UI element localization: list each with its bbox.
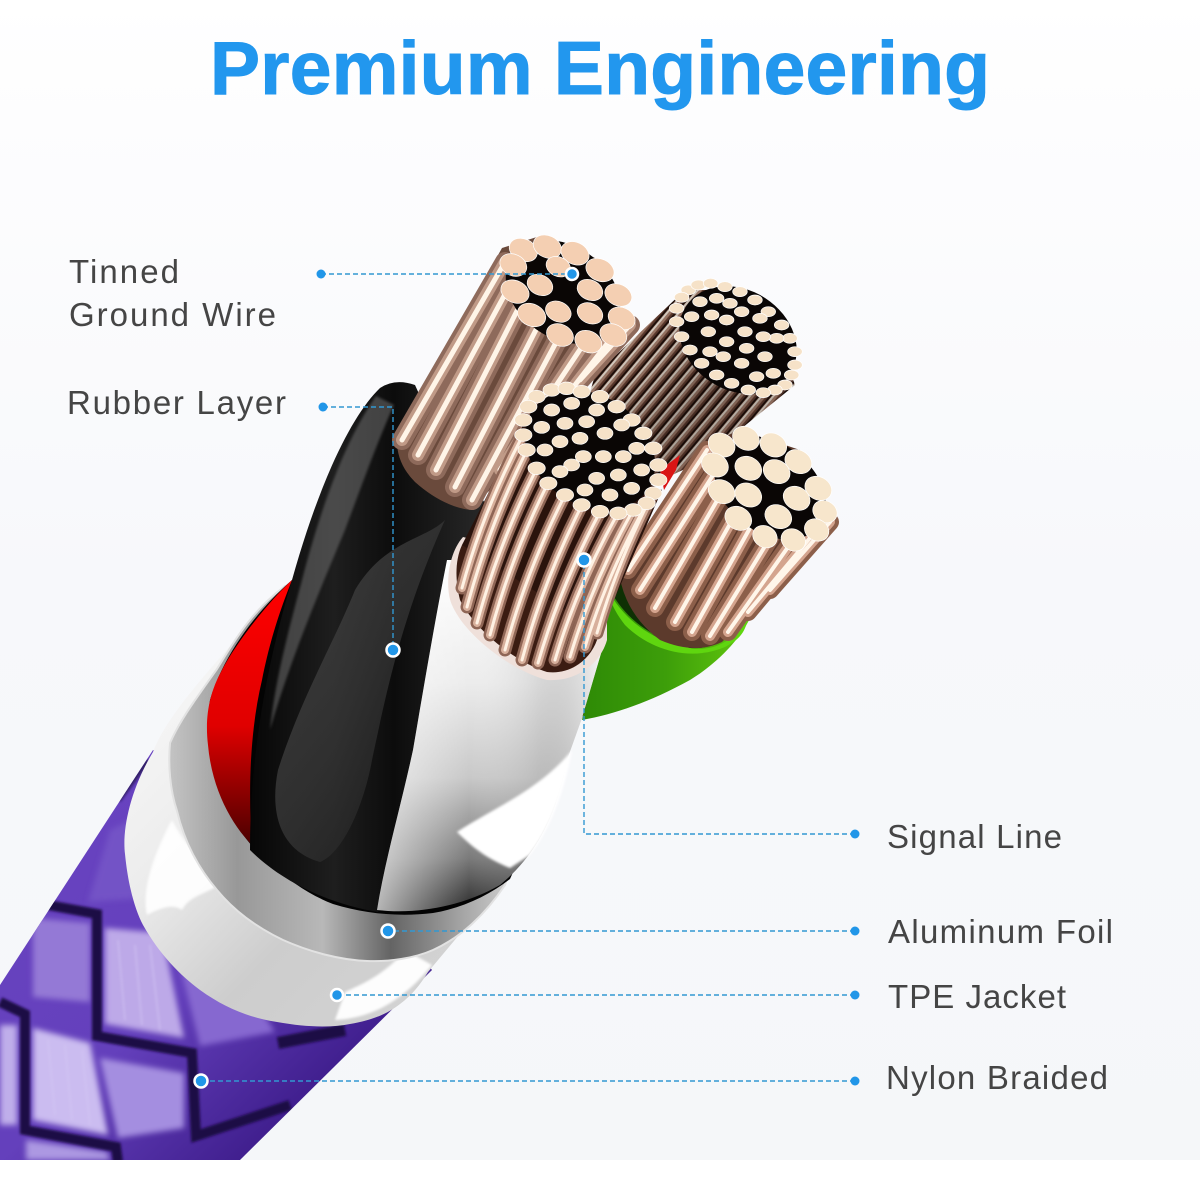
label: tinned ground wire: Ground Wire — [69, 296, 276, 333]
label: TPE jacket: TPE Jacket — [888, 978, 1066, 1015]
aluminum foil ring — [169, 586, 510, 961]
label: aluminum foil: Aluminum Foil — [888, 913, 1113, 950]
callout: rubber layer — [67, 384, 400, 656]
copper bundle: back right — [585, 264, 817, 490]
TPE jacket — [124, 635, 505, 1026]
small red and green wires — [660, 455, 680, 490]
core shadow panel — [275, 520, 445, 862]
label: tinned ground wire: Tinned — [69, 253, 179, 290]
copper bundle: front centre — [462, 366, 678, 663]
label: rubber layer: Rubber Layer — [67, 384, 286, 421]
nylon braided sheath — [0, 740, 440, 1162]
callout: TPE jacket — [331, 978, 1066, 1015]
callout: aluminum foil — [382, 913, 1113, 950]
callout: tinned ground wire — [69, 253, 578, 333]
green core — [582, 540, 750, 720]
callout: signal line — [578, 554, 1062, 855]
core highlight — [270, 396, 394, 730]
red core — [207, 580, 292, 845]
black core — [250, 382, 490, 912]
copper bundle: tinned ground wire — [397, 219, 640, 510]
white core — [377, 500, 607, 911]
copper base inside core — [456, 500, 605, 672]
title: Premium Engineering — [210, 26, 990, 110]
label: signal line: Signal Line — [887, 818, 1062, 855]
cable illustration — [0, 219, 846, 1162]
copper bundle: right — [618, 415, 846, 648]
inner opening — [208, 580, 590, 915]
jacket highlight — [146, 820, 432, 1020]
white core reflection — [457, 750, 572, 868]
white core rim — [448, 537, 607, 680]
callout: nylon braided — [194, 1059, 1108, 1096]
label: nylon braided: Nylon Braided — [886, 1059, 1108, 1096]
